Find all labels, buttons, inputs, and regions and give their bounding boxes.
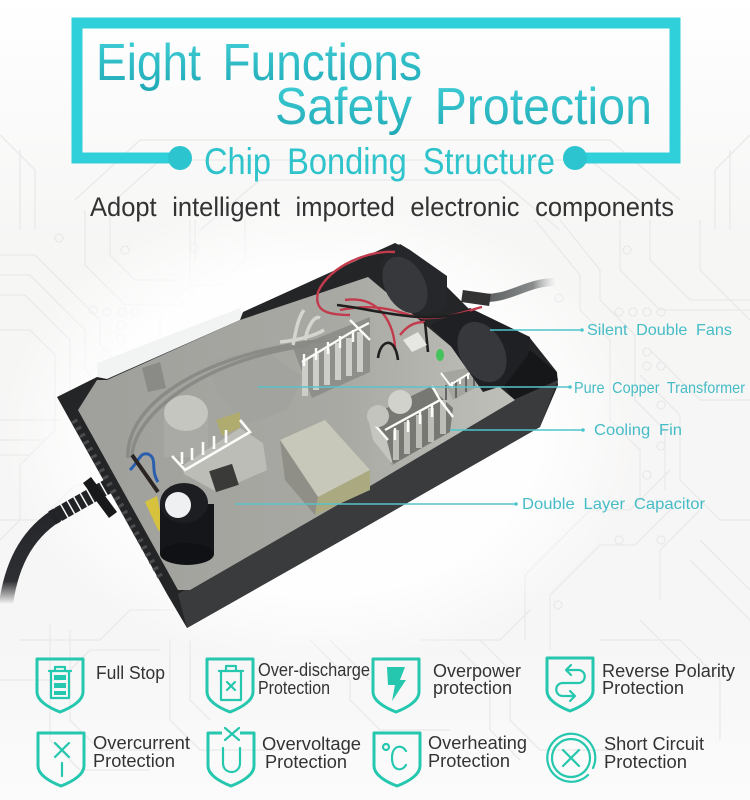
black wires: [337, 305, 470, 360]
callout: double layer capacitor: Double Layer Capacitor: [522, 496, 706, 513]
frame dot right: [563, 146, 587, 170]
callout: double layer capacitor: [235, 496, 706, 513]
subtitle: Chip Bonding Structure: [204, 141, 555, 182]
feature: over-discharge protection: [207, 659, 370, 712]
flat transformer block: [280, 420, 370, 515]
icon: lightning shield: [373, 659, 419, 712]
feature: overvoltage protection: Protection: [265, 752, 347, 772]
feature: full stop: Full Stop: [96, 663, 165, 683]
icon: empty battery shield: [207, 659, 253, 712]
feature: overcurrent protection: [38, 733, 190, 786]
feature: overvoltage protection: Overvoltage: [262, 734, 361, 754]
fan two: [430, 308, 530, 392]
white wires: [280, 310, 324, 345]
black capacitor: [160, 483, 214, 565]
red wires: [317, 252, 482, 350]
feature: short circuit protection: Protection: [604, 752, 687, 772]
right heat sink: [367, 386, 453, 465]
callout: cooling fin: [450, 422, 682, 439]
grey capacitor: [164, 395, 208, 457]
left power cord: [6, 480, 113, 604]
callout: silent double fans: Silent Double Fans: [587, 322, 732, 339]
black wire: [132, 455, 158, 492]
charger photo illustration: [6, 243, 558, 628]
feature: over-discharge protection: Over-discharge: [258, 660, 370, 680]
white tape at case edge: [97, 308, 245, 380]
feature: overcurrent protection: Overcurrent: [93, 733, 190, 753]
feature: overcurrent protection: Protection: [93, 751, 175, 771]
title line 2: Safety Protection: [275, 78, 652, 136]
side vent slots: [74, 420, 162, 580]
feature: overheating protection: Overheating: [428, 733, 527, 753]
title frame: [77, 23, 675, 170]
grey potting floor: [78, 277, 515, 590]
callout: cooling fin: Cooling Fin: [594, 422, 682, 439]
tagline: Adopt intelligent imported electronic components: [90, 192, 674, 222]
small regulator part: [142, 362, 166, 392]
icon: battery shield: [37, 659, 83, 712]
feature: short circuit protection: Short Circuit: [604, 734, 704, 754]
feature: overpower protection: Overpower: [433, 661, 521, 681]
large transformer block: [207, 347, 303, 424]
feature: reverse polarity protection: Protection: [602, 678, 684, 698]
frame dot left: [168, 146, 192, 170]
feature: overheating protection: Protection: [428, 751, 510, 771]
blue wire: [130, 454, 158, 482]
callout: silent double fans: [490, 322, 732, 339]
feature: overvoltage protection: [208, 728, 361, 786]
feature: short circuit protection: [547, 734, 704, 782]
right power cord: [462, 282, 556, 300]
grey wire bundle: [128, 340, 325, 458]
fan one: [373, 244, 447, 321]
icon: short circuit circle: [547, 734, 595, 782]
callout: pure copper transformer: [258, 380, 746, 397]
icon: temperature shield: [374, 733, 420, 786]
case rear corner: [500, 350, 558, 400]
yellow component: [145, 496, 165, 535]
icon: overvoltage shield: [208, 728, 254, 786]
green LED: [436, 349, 444, 361]
icon: reverse arrows shield: [547, 658, 593, 711]
charger case: [57, 243, 558, 628]
feature: over-discharge protection: Protection: [258, 678, 330, 698]
white glow behind charger: [0, 190, 640, 670]
feature: overpower protection: protection: [433, 678, 512, 698]
feature: reverse polarity protection: Reverse Polarity: [602, 661, 735, 681]
lower heat sink: [172, 412, 267, 492]
circuit board background pattern: [0, 135, 750, 770]
title line 1: Eight Functions: [96, 34, 422, 92]
white component: [403, 332, 427, 352]
feature: reverse polarity protection: [547, 658, 735, 711]
small heat sink: [441, 362, 478, 400]
feature: overpower protection: [373, 659, 521, 712]
feature: overheating protection: [374, 733, 527, 786]
upper heat sink: [293, 317, 370, 398]
case front face: [178, 380, 558, 628]
feature: full stop: [37, 659, 165, 712]
icon: overcurrent shield: [38, 733, 84, 786]
